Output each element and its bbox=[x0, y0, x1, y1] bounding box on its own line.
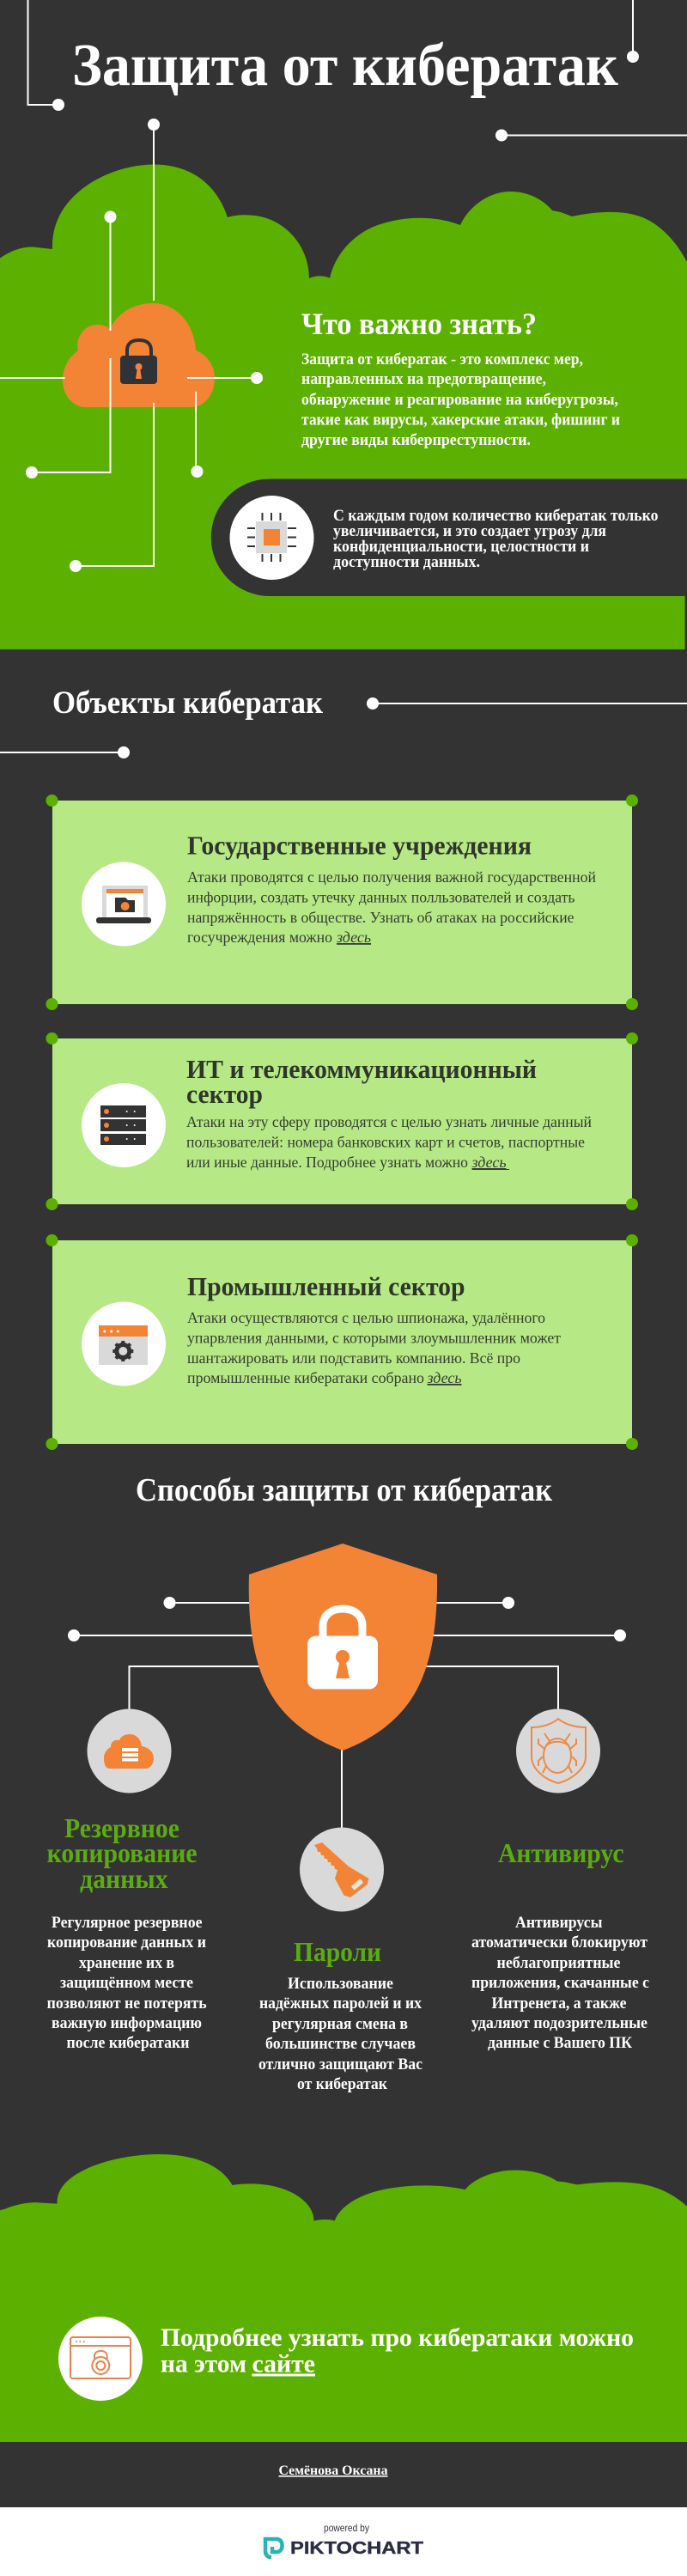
text block: antivirus: данные с Вашего ПК bbox=[488, 2035, 633, 2052]
icon: browser with combination lock bbox=[58, 2317, 143, 2401]
text block: IT and telecom: Атаки на эту сферу проводятся с целью узнать личные данный bbox=[186, 1113, 592, 1130]
circuit lines: attack targets heading bbox=[0, 697, 687, 758]
piktochart logo: powered by bbox=[324, 2522, 369, 2534]
piktochart logo: PIKTOCHART bbox=[290, 2539, 423, 2558]
text block: passwords: отлично защищают Вас bbox=[258, 2056, 423, 2074]
text block: call to action: сайте bbox=[252, 2350, 315, 2378]
text block: backup bbox=[47, 1915, 207, 2052]
text block: government: Атаки проводятся с целью получения важной государственной bbox=[187, 868, 596, 886]
text block: IT and telecom: здесь bbox=[471, 1154, 507, 1171]
text block: callout: доступности данных. bbox=[333, 554, 480, 571]
circuit lines: cloud connectors bbox=[0, 119, 263, 572]
text block: definition: обнаружение и реагирование на киберугрозы, bbox=[301, 392, 618, 409]
text block: passwords: от кибератак bbox=[297, 2076, 387, 2093]
panel: IT and telecom card bbox=[46, 1032, 638, 1210]
text block: backup: защищённом месте bbox=[60, 1975, 193, 1992]
panel: top green cloud bbox=[0, 165, 687, 649]
text block: IT and telecom: пользователей: номера банковских карт и счетов, паспортные bbox=[186, 1134, 585, 1151]
text block: antivirus: удаляют подозрительные bbox=[471, 2015, 647, 2032]
author credit: Семёнова Оксана bbox=[278, 2463, 388, 2478]
text block: passwords: регулярная смена в bbox=[272, 2016, 408, 2033]
heading: protection methods: Способы защиты от кибератак bbox=[136, 1472, 552, 1508]
icon: server rack bbox=[82, 1083, 166, 1167]
piktochart logo bbox=[265, 2522, 423, 2558]
text block: industrial: Атаки осуществляются с целью шпионажа, удалённого bbox=[187, 1309, 545, 1326]
heading: IT and telecom: сектор bbox=[186, 1079, 263, 1109]
heading: backup: данных bbox=[80, 1863, 168, 1894]
icon: white padlock bbox=[307, 1609, 378, 1689]
text block: IT and telecom: или иные данные. Подробнее узнать можно bbox=[186, 1154, 468, 1171]
text block: antivirus: неблагоприятные bbox=[496, 1955, 620, 1972]
text block: backup: важную информацию bbox=[52, 2015, 202, 2032]
icon: key bbox=[300, 1828, 384, 1912]
panel: white footer strip bbox=[0, 2507, 687, 2576]
text block: definition: Защита от кибератак - это комплекс мер, bbox=[301, 351, 583, 368]
text block: passwords: надёжных паролей и их bbox=[259, 1995, 423, 2013]
icon: cloud backup bbox=[88, 1709, 172, 1793]
text block: government bbox=[187, 868, 596, 946]
text block: callout: С каждым годом количество кибератак только bbox=[333, 508, 658, 525]
text block: antivirus: атоматически блокируют bbox=[471, 1934, 647, 1952]
text block: definition: направленных на предотвращение, bbox=[301, 371, 546, 388]
icon: laptop with folder bbox=[82, 862, 166, 947]
text block: backup: позволяют не потерять bbox=[47, 1995, 207, 2013]
text block: callout: увеличивается, и это создает угрозу для bbox=[333, 523, 606, 540]
text block: callout bbox=[333, 508, 658, 571]
heading: attack targets: Объекты кибератак bbox=[52, 685, 324, 721]
text block: definition: другие виды киберпреступности. bbox=[301, 432, 531, 449]
heading: industrial: Промышленный сектор bbox=[187, 1271, 465, 1301]
text block: antivirus: приложения, скачанные с bbox=[471, 1975, 649, 1992]
heading: government: Государственные учреждения bbox=[187, 830, 532, 861]
icon: orange shield with padlock bbox=[249, 1544, 437, 1751]
text block: industrial bbox=[187, 1309, 561, 1386]
method: antivirus bbox=[471, 1709, 649, 2052]
panel: industrial card bbox=[46, 1234, 638, 1450]
heading: backup: Резервное bbox=[64, 1812, 179, 1843]
text block: callout: конфиденциальности, целостности и bbox=[333, 539, 589, 556]
text block: antivirus bbox=[471, 1915, 649, 2052]
text block: passwords: большинстве случаев bbox=[265, 2036, 416, 2053]
heading: what is important: Что важно знать? bbox=[301, 307, 537, 341]
text block: backup: после кибератаки bbox=[67, 2035, 190, 2052]
text block: industrial: упарвления данными, с которыми злоумышленник может bbox=[187, 1330, 561, 1347]
text block: government: инфорции, создать утечку данных полльзователей и создать bbox=[187, 888, 575, 905]
circuit lines: shield connectors bbox=[68, 1597, 626, 1828]
text block: government: напряжённость в обществе. Узнать об атаках на российские bbox=[187, 909, 575, 926]
heading: backup: копирование bbox=[47, 1837, 198, 1868]
panel: footer green cloud bbox=[0, 2154, 687, 2442]
text block: backup: хранение их в bbox=[79, 1955, 174, 1972]
icon: shield with bug bbox=[516, 1709, 600, 1793]
circuit lines: header bbox=[27, 0, 687, 141]
text block: antivirus: Интренета, а также bbox=[491, 1995, 627, 2013]
method: backup bbox=[47, 1709, 207, 2052]
heading: IT and telecom: ИТ и телекоммуникационный bbox=[186, 1054, 537, 1084]
text block: antivirus: Антивирусы bbox=[515, 1915, 603, 1932]
text block: industrial: промышленные кибератаки собрано bbox=[187, 1369, 424, 1386]
heading: backup bbox=[47, 1812, 198, 1894]
text block: government: госучреждения можно bbox=[187, 929, 332, 946]
heading: passwords: Пароли bbox=[294, 1936, 381, 1967]
heading: antivirus: Антивирус bbox=[498, 1837, 623, 1868]
text block: definition bbox=[301, 351, 620, 449]
text block: passwords bbox=[258, 1976, 423, 2093]
text block: passwords: Использование bbox=[288, 1976, 393, 1993]
text block: industrial: шантажировать или подставить компанию. Всё про bbox=[187, 1349, 520, 1367]
icon: microchip bbox=[230, 496, 314, 580]
panel: dark callout pill bbox=[211, 479, 687, 596]
icon: padlock bbox=[120, 340, 157, 384]
text block: government: здесь bbox=[336, 929, 371, 946]
text block: call to action: Подробнее узнать про кибератаки можно bbox=[161, 2323, 634, 2352]
text block: IT and telecom bbox=[186, 1113, 592, 1171]
text block: backup: Регулярное резервное bbox=[52, 1915, 203, 1932]
method: passwords bbox=[258, 1828, 423, 2093]
title: Защита от кибератак bbox=[72, 33, 619, 99]
text block: call to action: на этом bbox=[161, 2350, 246, 2378]
text block: call to action bbox=[161, 2323, 634, 2378]
icon: browser window with gear bbox=[82, 1302, 166, 1386]
text block: industrial: здесь bbox=[427, 1369, 462, 1386]
heading: IT and telecom bbox=[186, 1054, 537, 1109]
text block: definition: такие как вирусы, хакерские атаки, фишинг и bbox=[301, 412, 620, 429]
panel: government card bbox=[46, 795, 638, 1010]
text block: backup: копирование данных и bbox=[47, 1934, 206, 1952]
icon: orange cloud with padlock bbox=[63, 303, 215, 407]
